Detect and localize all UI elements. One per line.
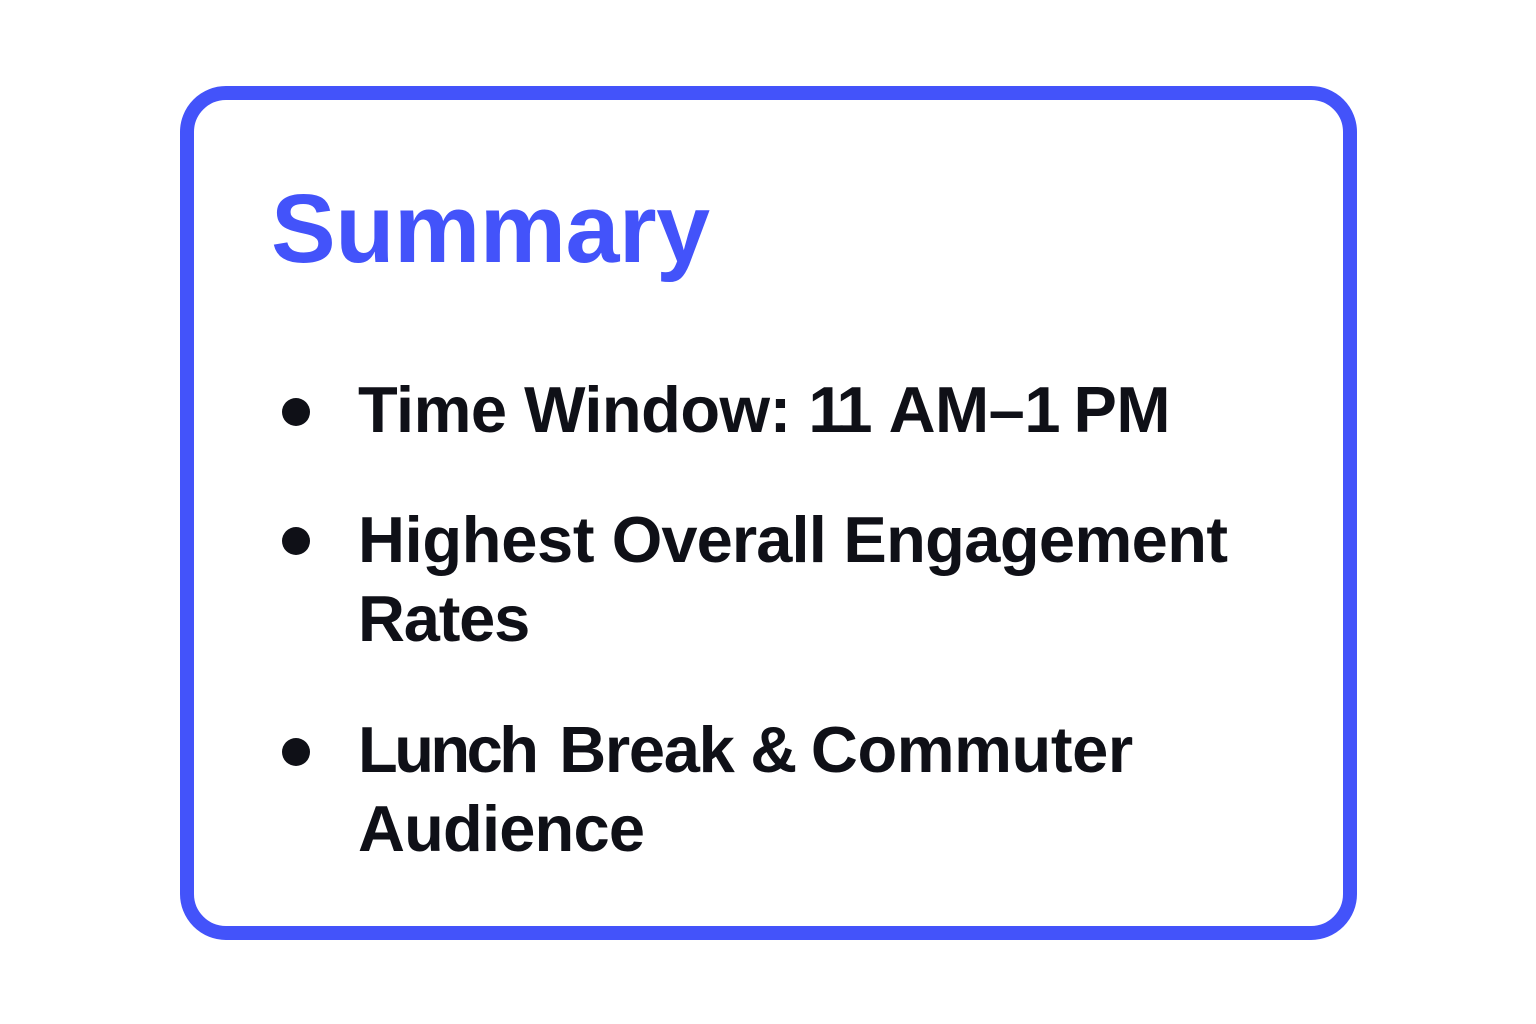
text: lunch break and commuter audience: Lunch Break & Commuter [358,713,1133,786]
text: lunch break and commuter audience: Audience [358,792,644,865]
summary card panel [180,86,1357,940]
heading: Summary: Summary [271,174,710,283]
bullet icon 2 [282,527,310,555]
text: highest overall engagement rates: Highest Overall Engagement [358,503,1227,576]
bullet icon 3 [282,738,310,766]
text: lunch break and commuter audience [358,713,1133,865]
text: highest overall engagement rates [358,503,1228,655]
bullet icon 1 [282,398,310,426]
text: time window: Time Window: 11 AM–1 PM [358,373,1170,446]
text: highest overall engagement rates: Rates [358,582,529,655]
